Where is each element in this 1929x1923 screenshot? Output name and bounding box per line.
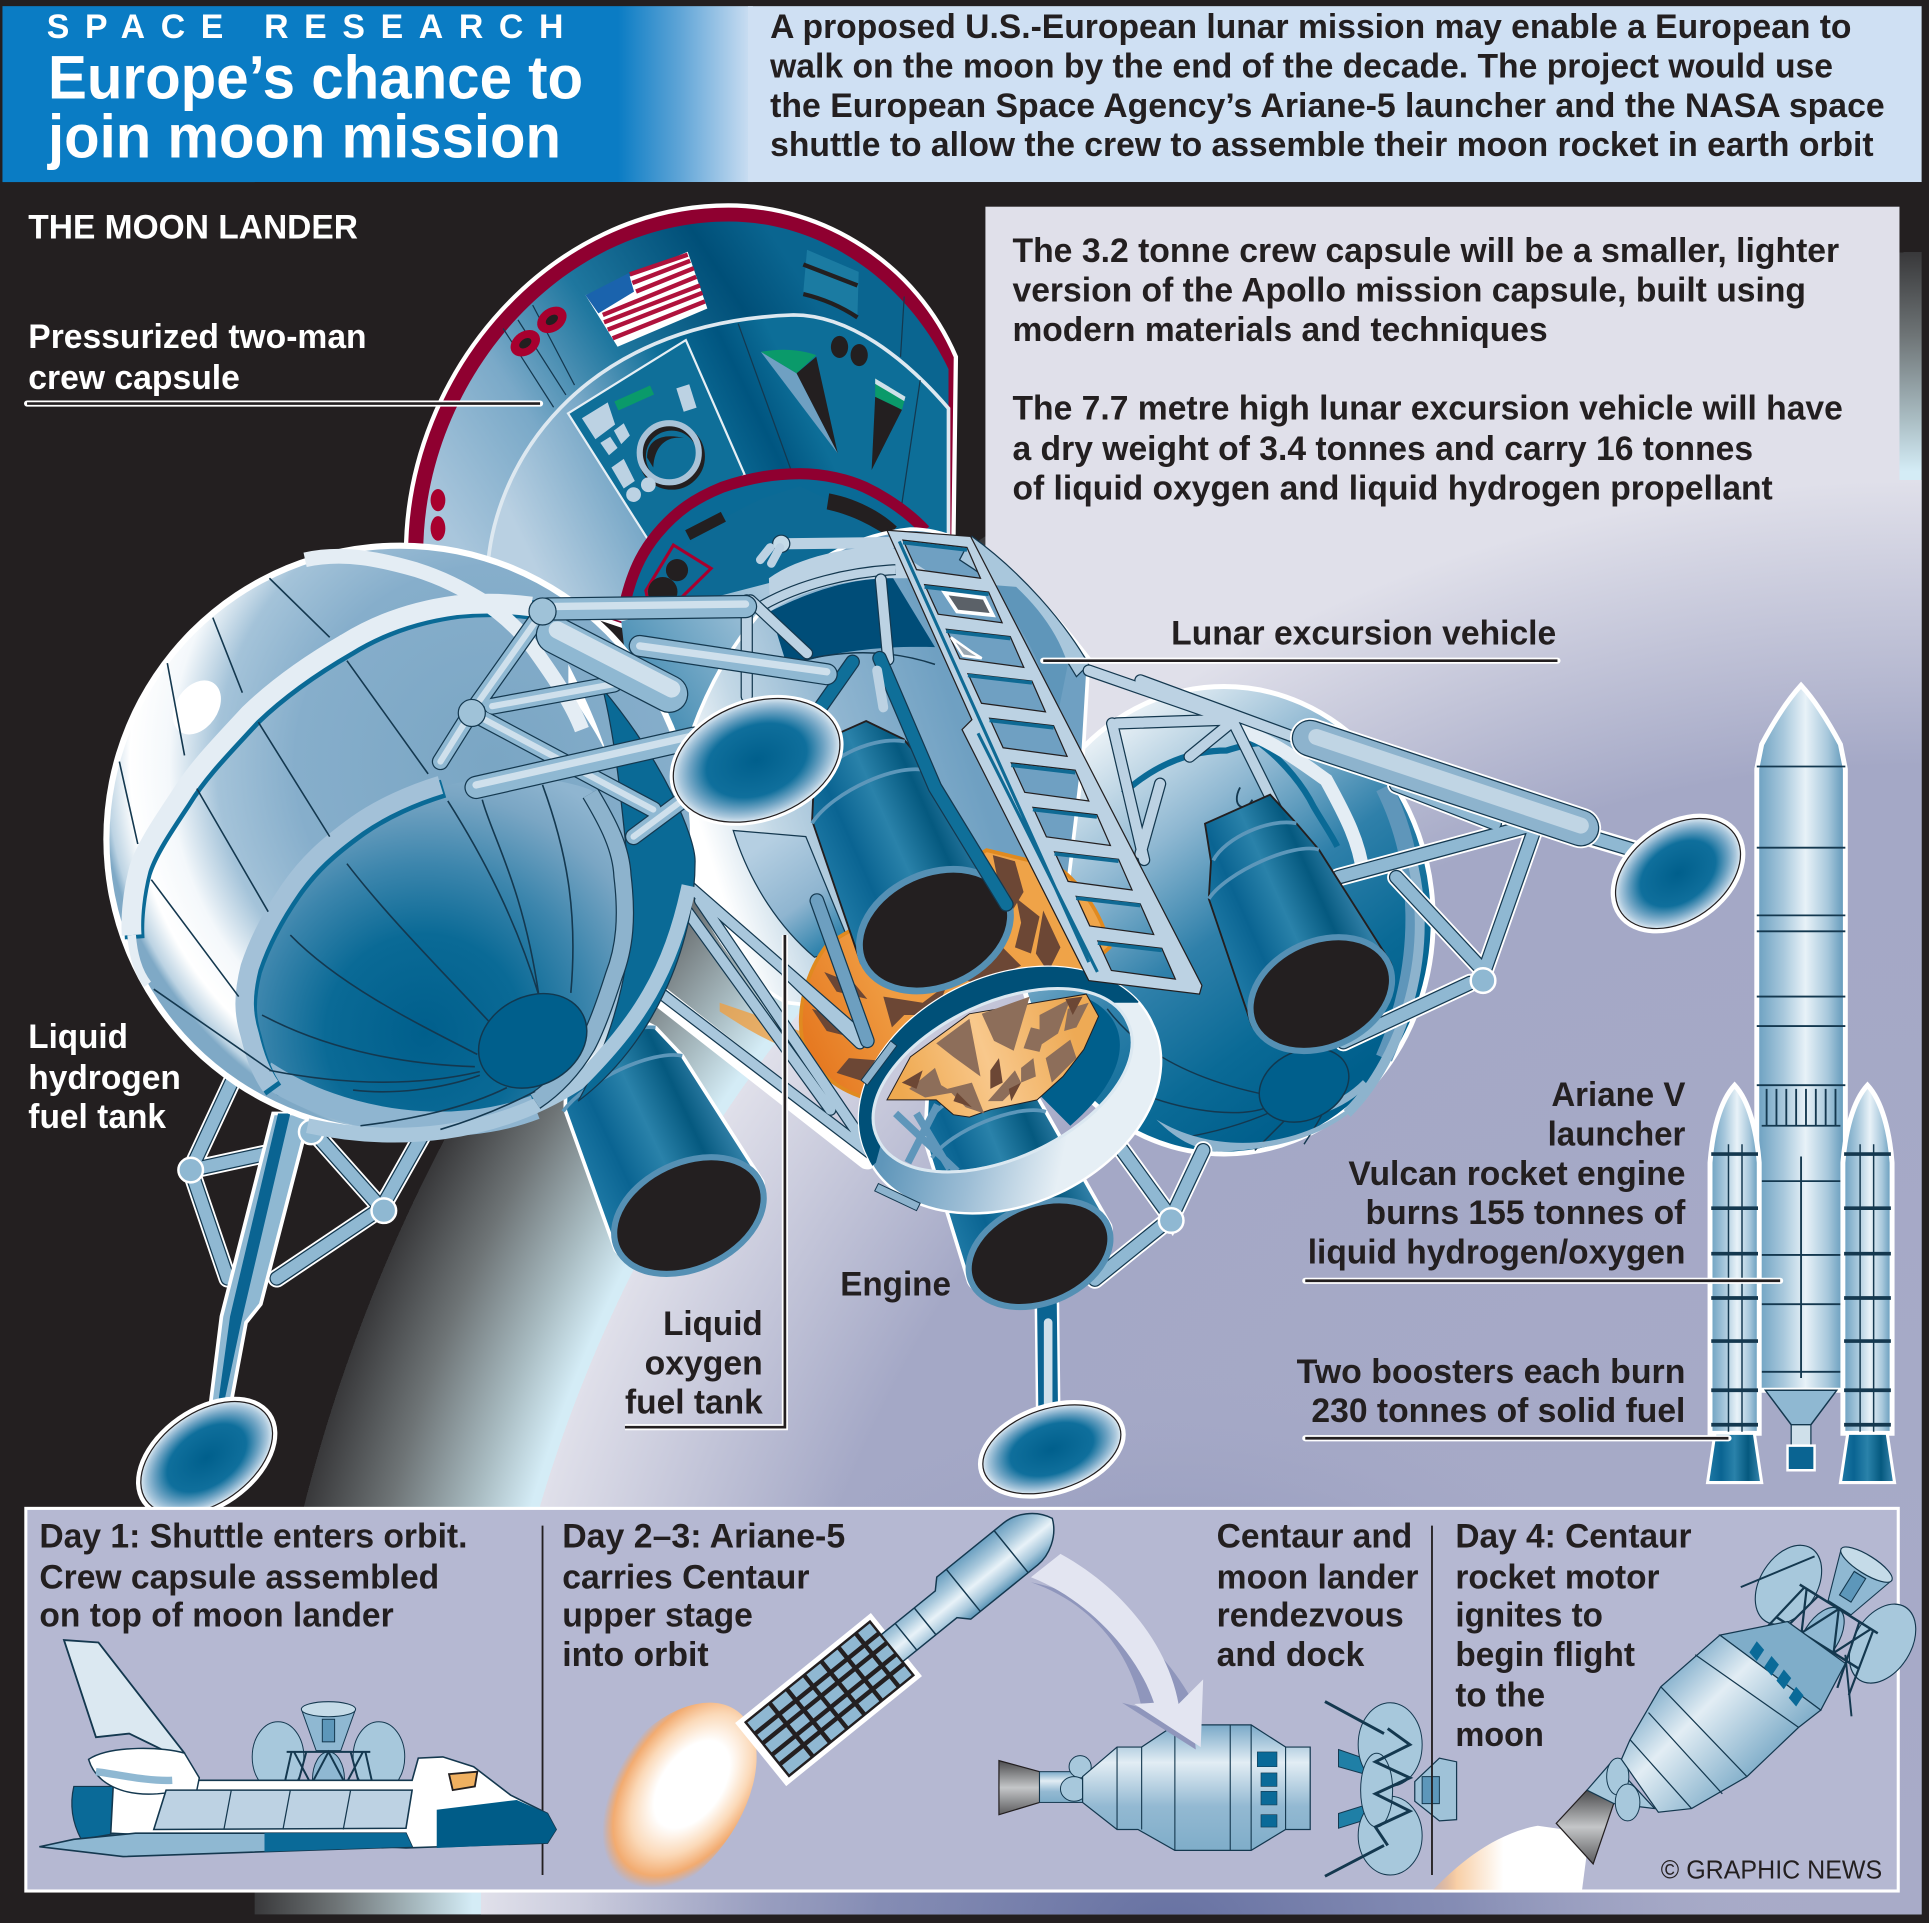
rendezvous text: rendezvous xyxy=(1217,1596,1404,1634)
day 1 text: Day 1: Shuttle enters orbit. xyxy=(39,1518,467,1556)
header intro panel: shuttle to allow the crew to assemble their moon rocket in earth orbit xyxy=(770,126,1874,164)
dark arch under dome xyxy=(770,578,935,667)
label: crew capsule: crew capsule xyxy=(28,359,240,397)
insulation foil on oxygen tank xyxy=(720,850,1110,1097)
label: Ariane V launcher and Vulcan engine: liquid hydrogen/oxygen xyxy=(1308,1234,1685,1272)
landing pad: left xyxy=(113,1371,300,1544)
shuttle with moon lander xyxy=(39,1640,556,1857)
label: Ariane V launcher and Vulcan engine: Vulcan rocket engine xyxy=(1348,1155,1685,1193)
tank bands xyxy=(131,556,625,1101)
day 1 text xyxy=(39,1518,467,1634)
day 2-3 text: carries Centaur xyxy=(562,1558,809,1596)
label: liquid hydrogen fuel tank: Liquid xyxy=(28,1018,128,1056)
Centaur with moon lander flying to the moon xyxy=(1556,1512,1929,1864)
ladder xyxy=(887,530,1202,994)
capsule window panel xyxy=(568,340,745,540)
liquid oxygen fuel tank (centre) xyxy=(621,529,1089,1006)
label: boosters: Two boosters each burn xyxy=(1297,1353,1685,1391)
rendezvous text: and dock xyxy=(1217,1636,1365,1674)
label: liquid hydrogen fuel tank xyxy=(28,1018,181,1136)
Ariane V rocket xyxy=(1708,685,1895,1483)
panel text: capsule: version of the Apollo mission capsule, built using xyxy=(1012,271,1806,309)
engine centre xyxy=(772,697,1032,1015)
day 4 text: ignites to xyxy=(1455,1596,1603,1634)
header intro panel xyxy=(748,6,1922,182)
day 4 text: rocket motor xyxy=(1455,1558,1660,1596)
label: lunar excursion vehicle: Lunar excursion vehicle xyxy=(1171,615,1556,653)
earth atmosphere arc and information panel background xyxy=(255,182,1922,1914)
label: liquid hydrogen fuel tank: hydrogen xyxy=(28,1059,181,1097)
divider two xyxy=(1431,1526,1433,1875)
header band: title block xyxy=(2,6,753,182)
booster right xyxy=(1840,1085,1895,1483)
flame of Centaur xyxy=(1433,1826,1589,1890)
copyright: © GRAPHIC NEWS xyxy=(1661,1857,1882,1885)
main title: Europe’s chance to xyxy=(48,43,583,112)
label: engine: Engine xyxy=(840,1266,951,1304)
moon lander ready to dock xyxy=(1325,1702,1457,1876)
lower-left truss xyxy=(657,887,873,1159)
landing pad: right xyxy=(1588,789,1768,958)
rendezvous text xyxy=(1217,1518,1418,1674)
rendezvous text: moon lander xyxy=(1217,1558,1418,1596)
Centaur stage xyxy=(999,1725,1310,1850)
panel text: capsule: modern materials and techniques xyxy=(1012,311,1548,349)
label: boosters: 230 tonnes of solid fuel xyxy=(1311,1392,1685,1430)
curved arrow xyxy=(1031,1554,1203,1750)
main title: join moon mission xyxy=(47,102,561,171)
landing pad: upper xyxy=(651,672,862,849)
label: boosters xyxy=(1297,1353,1728,1438)
header intro panel: the European Space Agency’s Ariane-5 launcher and the NASA space xyxy=(770,87,1885,125)
header kicker: SPACE RESEARCH xyxy=(47,8,563,46)
label: Ariane V launcher and Vulcan engine: Ariane V xyxy=(1551,1076,1686,1114)
Ariane-5 in flight xyxy=(735,1487,1078,1786)
label: liquid oxygen fuel tank xyxy=(625,935,785,1427)
day 1 text: Crew capsule assembled xyxy=(39,1558,439,1596)
label: liquid oxygen fuel tank: Liquid xyxy=(663,1305,763,1343)
Vulcan engine xyxy=(1765,1390,1837,1470)
day 2-3 text: into orbit xyxy=(562,1636,709,1674)
label: Ariane V launcher and Vulcan engine xyxy=(1305,1076,1780,1281)
label: crew capsule: Pressurized two-man xyxy=(28,318,367,356)
rocket ring lines xyxy=(1757,766,1845,1378)
panel text: excursion vehicle xyxy=(1012,390,1843,508)
rendezvous text: Centaur and xyxy=(1217,1518,1412,1556)
day 4 text: to the xyxy=(1455,1676,1545,1714)
label: crew capsule xyxy=(27,318,540,404)
engine right xyxy=(1169,778,1412,1073)
label: liquid hydrogen fuel tank: fuel tank xyxy=(28,1098,166,1136)
label: Ariane V launcher and Vulcan engine: launcher xyxy=(1548,1115,1685,1153)
panel text: excursion vehicle: of liquid oxygen and liquid hydrogen propellant xyxy=(1012,470,1773,508)
struts in front of centre tank xyxy=(812,658,1006,904)
US flag xyxy=(586,252,707,347)
panel text: capsule: The 3.2 tonne crew capsule will be a smaller, lighter xyxy=(1012,232,1839,270)
day 4 text: begin flight xyxy=(1455,1636,1635,1674)
engine lower left xyxy=(523,983,785,1298)
day 2-3 text xyxy=(562,1518,845,1674)
header intro panel: A proposed U.S.-European lunar mission may enable a European to xyxy=(770,8,1851,46)
day 1 text: on top of moon lander xyxy=(39,1596,394,1634)
moon lander illustration xyxy=(103,205,1768,1544)
label: liquid oxygen fuel tank: oxygen xyxy=(645,1344,763,1382)
header intro panel: walk on the moon by the end of the decade. The project would use xyxy=(769,48,1833,86)
docking ring with rock-textured foil xyxy=(859,967,1161,1213)
flame of Ariane-5 xyxy=(549,1671,792,1923)
tank end cap xyxy=(462,975,603,1107)
day 4 text: moon xyxy=(1455,1716,1544,1754)
left liquid hydrogen tank xyxy=(103,543,696,1136)
panel text: excursion vehicle: a dry weight of 3.4 tonnes and carry 16 tonnes xyxy=(1012,430,1753,468)
crew capsule xyxy=(406,205,956,627)
engine lower centre xyxy=(888,1025,1129,1328)
upper struts xyxy=(440,535,892,837)
day 2-3 text: Day 2–3: Ariane-5 xyxy=(562,1518,845,1556)
divider one xyxy=(542,1526,544,1875)
day 2-3 text: upper stage xyxy=(562,1596,753,1634)
main title xyxy=(47,43,583,171)
label: the moon lander: THE MOON LANDER xyxy=(28,209,358,247)
day 4 text xyxy=(1455,1518,1692,1754)
struts behind engines xyxy=(747,579,1307,870)
booster left xyxy=(1708,1085,1762,1483)
day 4 text: Day 4: Centaur xyxy=(1455,1518,1692,1556)
panel text: excursion vehicle: The 7.7 metre high lunar excursion vehicle will have xyxy=(1012,390,1843,428)
main stage xyxy=(1757,685,1845,1390)
panel text: capsule xyxy=(1012,232,1839,349)
panel: mission timeline xyxy=(26,1487,1929,1923)
right hydrogen tank xyxy=(1015,687,1433,1154)
tank meridian lines xyxy=(119,578,573,1129)
label: liquid oxygen fuel tank: fuel tank xyxy=(625,1384,763,1422)
label: Ariane V launcher and Vulcan engine: burns 155 tonnes of xyxy=(1366,1194,1686,1232)
lander struts and legs xyxy=(178,737,1642,1415)
landing pad: bottom xyxy=(965,1382,1138,1516)
